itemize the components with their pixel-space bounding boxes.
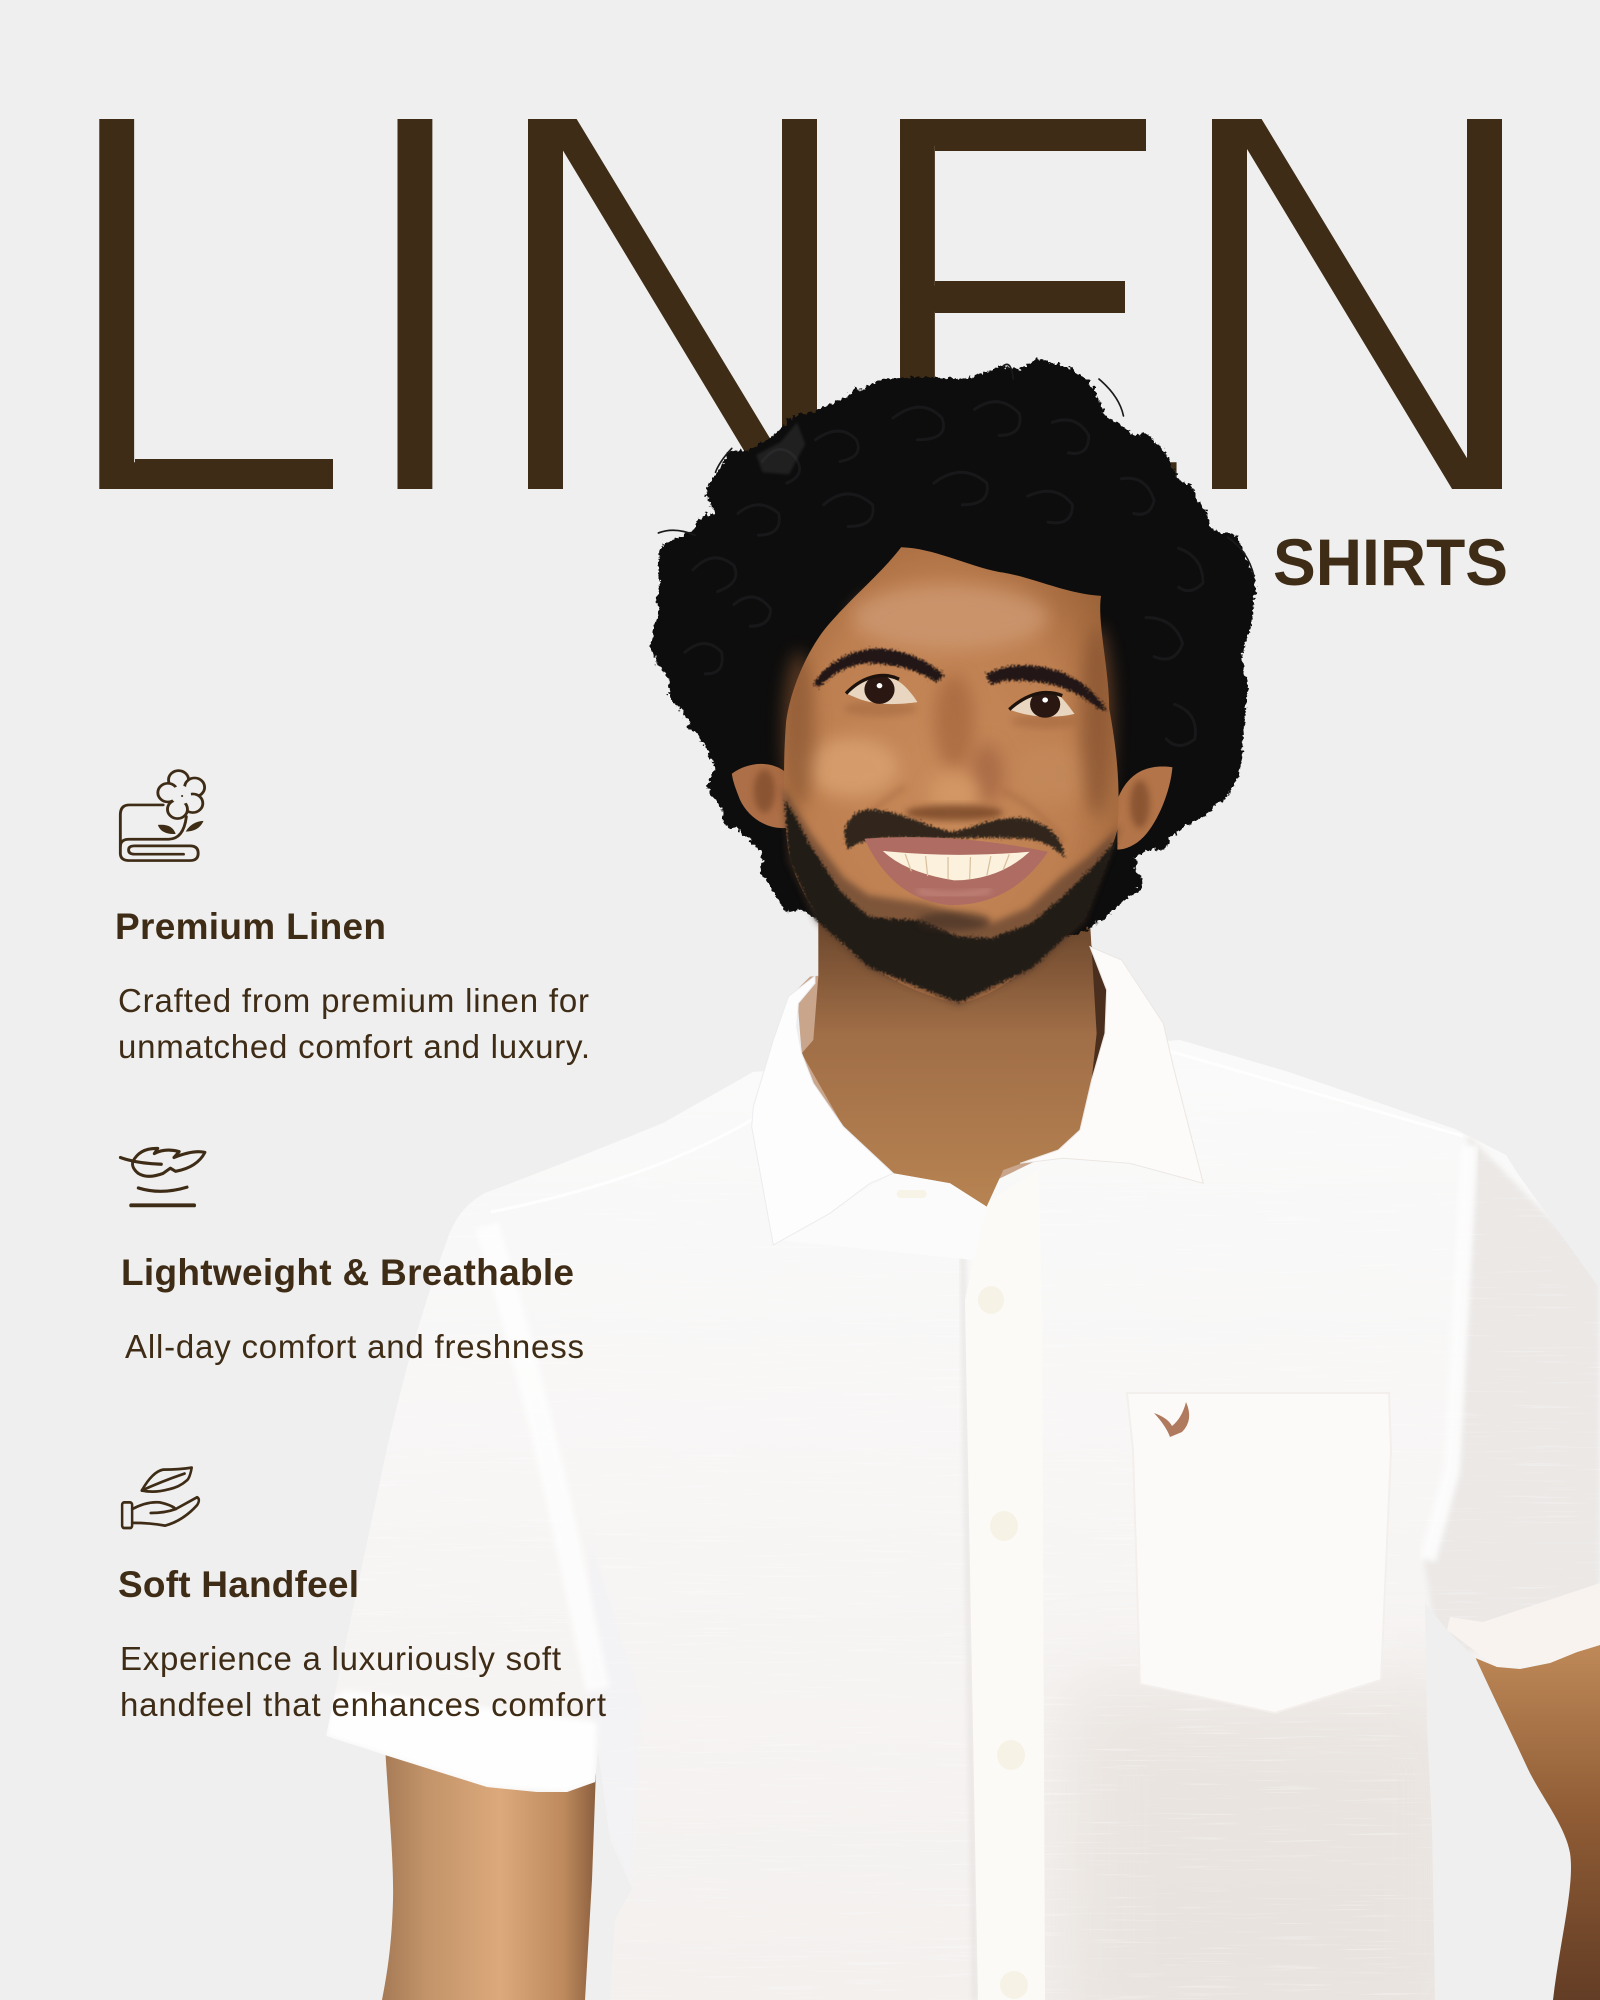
left sleeve seam [552,1489,606,1688]
teeth [883,851,1030,880]
icon: towel with flower [120,771,205,861]
shoulder yoke lines [491,1051,1463,1212]
description: Experience a luxuriously soft [120,1640,561,1677]
right sleeve seam [1428,1145,1470,1560]
left eye [844,675,917,716]
model photo illustration [300,361,1600,2000]
right eye [1009,691,1077,728]
translucent grey hair edge [756,422,805,474]
moustache [844,809,1065,858]
left eyebrow [813,649,944,687]
description: All-day comfort and freshness [125,1328,584,1365]
icon: feather [120,1148,205,1205]
left cuff [326,1690,597,1792]
soft beard shadow [783,787,1121,1006]
left ear [732,764,788,828]
hair strands [685,402,1203,746]
smile lines [848,787,1064,843]
title: LINEN: LINEN [47,0,1552,616]
subtitle: SHIRTS: SHIRTS [1273,525,1508,599]
head [651,361,1254,1006]
feature: Lightweight & Breathable [120,1148,584,1365]
soul patch [917,912,991,931]
facial shading [934,674,975,769]
right ear [1117,766,1172,850]
right cuff [1447,1583,1600,1667]
mouth [864,837,1048,905]
right collar [1020,947,1203,1183]
heading: Premium Linen [115,906,386,947]
right eyebrow [986,666,1107,711]
right arm [1472,1630,1600,2000]
feature: Premium Linen [115,771,590,1065]
lower lip highlight [917,890,991,895]
chest pocket [1127,1393,1391,1713]
embroidered logo [1154,1402,1189,1437]
left collar [752,976,893,1245]
shirt [300,1000,1600,2000]
buttons [978,1286,1028,1999]
heading: Soft Handfeel [118,1564,359,1605]
beard [785,800,1117,1003]
description: Crafted from premium linen for [118,982,589,1019]
hair mass [651,361,1254,930]
feature: Soft Handfeel [118,1468,606,1723]
heading: Lightweight & Breathable [121,1252,574,1293]
neck [752,893,1203,1260]
description: unmatched comfort and luxury. [118,1028,590,1065]
placket [965,1170,1045,2000]
left arm [382,1745,596,2000]
nose base [905,805,1003,821]
collar stand button [897,1190,927,1198]
placket shadow [962,1200,975,2000]
white inside placket [777,1173,987,1260]
description: handfeel that enhances comfort [120,1686,606,1723]
stray wisps [658,364,1254,576]
icon: hand and leaf [122,1468,199,1528]
face [784,547,1119,1004]
